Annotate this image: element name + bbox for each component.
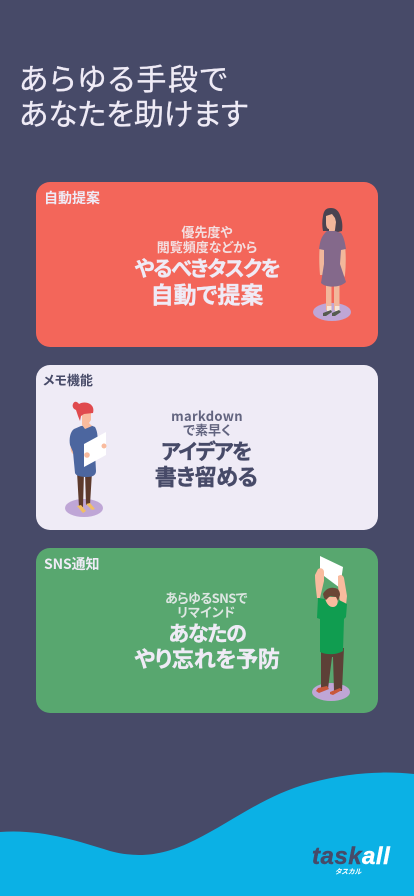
description: markdownで素早く — [171, 406, 243, 439]
panel label: SNS通知: SNS通知 — [44, 554, 99, 574]
headline: やるべきタスクを自動で提案 — [134, 253, 280, 310]
description: あらゆるSNSでリマインド — [165, 588, 248, 621]
description: markdownで素早く: markdown — [171, 406, 243, 425]
headline: アイデアを書き留める — [155, 436, 257, 492]
headline: あなたのやり忘れを予防: やり忘れを予防 — [134, 642, 280, 674]
illustration: woman holding paper — [65, 402, 106, 517]
panel: SNS通知 — [36, 548, 378, 713]
description: 優先度や閲覧頻度などから — [157, 222, 257, 256]
headline: やるべきタスクを自動で提案: やるべきタスクを — [135, 253, 279, 283]
description: 優先度や閲覧頻度などから: 優先度や — [181, 222, 233, 241]
panel: メモ機能 — [36, 365, 378, 530]
logo wordmark: taskall — [312, 843, 390, 870]
title: あらゆる手段で — [19, 55, 229, 99]
description: markdownで素早く: で素早く — [183, 420, 231, 439]
headline: あなたのやり忘れを予防 — [134, 618, 280, 674]
description: あらゆるSNSでリマインド: あらゆるSNSで — [165, 588, 247, 607]
logo katakana: タスカル: タスカル — [335, 867, 361, 877]
title — [19, 55, 248, 134]
headline: あなたのやり忘れを予防: あなたの — [168, 618, 246, 648]
illustration: man holding paper overhead — [312, 556, 350, 701]
logo: taskall — [312, 843, 390, 877]
description: 優先度や閲覧頻度などから: 閲覧頻度などから — [157, 237, 257, 256]
description: あらゆるSNSでリマインド: リマインド — [177, 602, 235, 621]
headline: アイデアを書き留める: 書き留める — [155, 460, 257, 492]
panel: 自動提案 — [36, 182, 378, 347]
title: あなたを助けます — [19, 90, 248, 134]
illustration: woman in purple dress — [313, 208, 351, 321]
background wave — [0, 772, 414, 896]
headline: やるべきタスクを自動で提案: 自動で提案 — [151, 276, 263, 310]
panel label: 自動提案: 自動提案 — [44, 188, 100, 208]
panel label: メモ機能: メモ機能 — [43, 370, 93, 389]
headline: アイデアを書き留める: アイデアを — [161, 436, 251, 466]
